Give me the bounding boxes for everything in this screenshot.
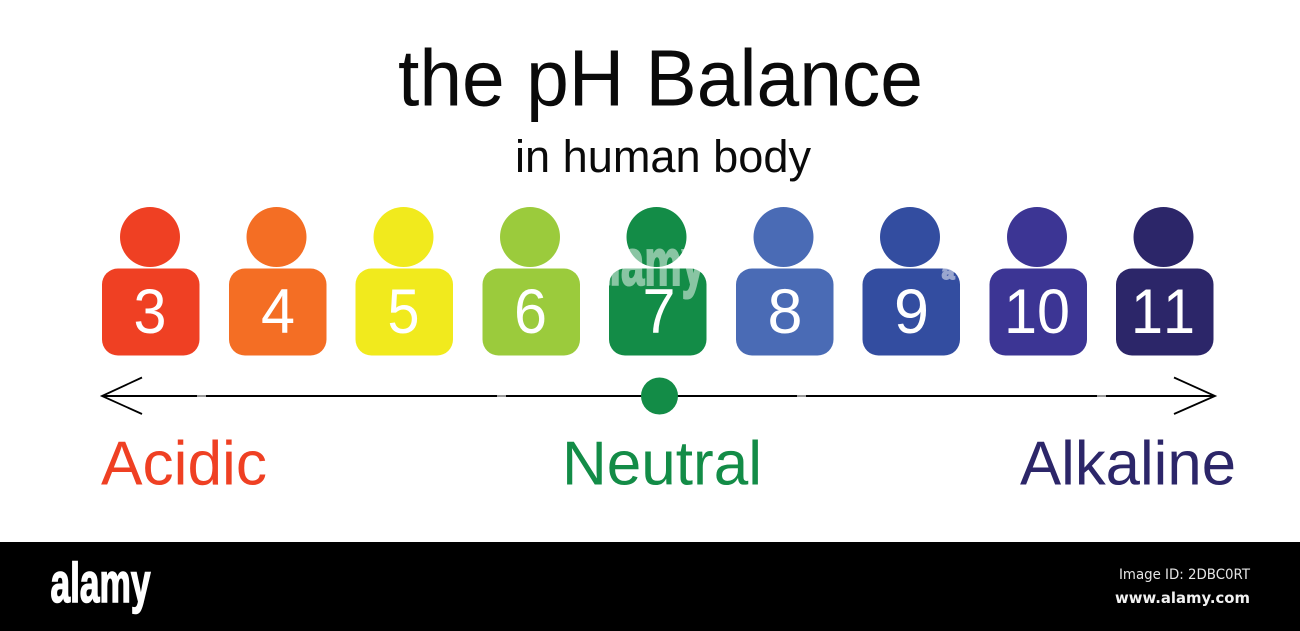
footer band — [0, 542, 1300, 631]
marker: neutral dot — [641, 378, 678, 414]
watermark: alamy overlay — [586, 225, 955, 299]
person: pH 3 — [102, 207, 200, 356]
website: www.alamy.com — [1115, 589, 1250, 607]
person: pH 11: 11 — [1131, 277, 1195, 347]
label: Acidic: Acidic — [101, 430, 267, 498]
person: pH 10: 10 — [1004, 277, 1070, 347]
person: pH 7: 7 — [642, 277, 676, 347]
person: pH 8 — [736, 207, 834, 356]
person: pH 7 — [609, 207, 706, 356]
person: pH 9 — [862, 207, 960, 356]
person: pH 6 — [482, 207, 580, 356]
label: Neutral: Neutral — [562, 430, 762, 498]
arrow: pH scale — [102, 378, 1215, 414]
watermark: alamy overlay: a — [942, 259, 955, 284]
person: pH 11 — [1116, 207, 1214, 356]
subtitle: in human body — [515, 131, 812, 182]
person: pH 4: 4 — [261, 277, 295, 347]
person: pH 9: 9 — [894, 277, 929, 347]
image id: Image ID: 2DBC0RT — [1119, 567, 1250, 583]
person: pH 3: 3 — [134, 277, 166, 347]
person: pH 10 — [990, 207, 1087, 356]
person: pH 5 — [356, 207, 453, 356]
person: pH 4 — [229, 207, 326, 356]
person: pH 5: 5 — [388, 277, 420, 347]
watermark: alamy overlay: alamy — [586, 225, 705, 299]
label: Alkaline: Alkaline — [1020, 430, 1236, 498]
person: pH 6: 6 — [514, 277, 547, 347]
logo: alamy: alamy — [50, 551, 150, 614]
title: the pH Balance — [398, 34, 923, 122]
person: pH 8: 8 — [768, 277, 802, 347]
